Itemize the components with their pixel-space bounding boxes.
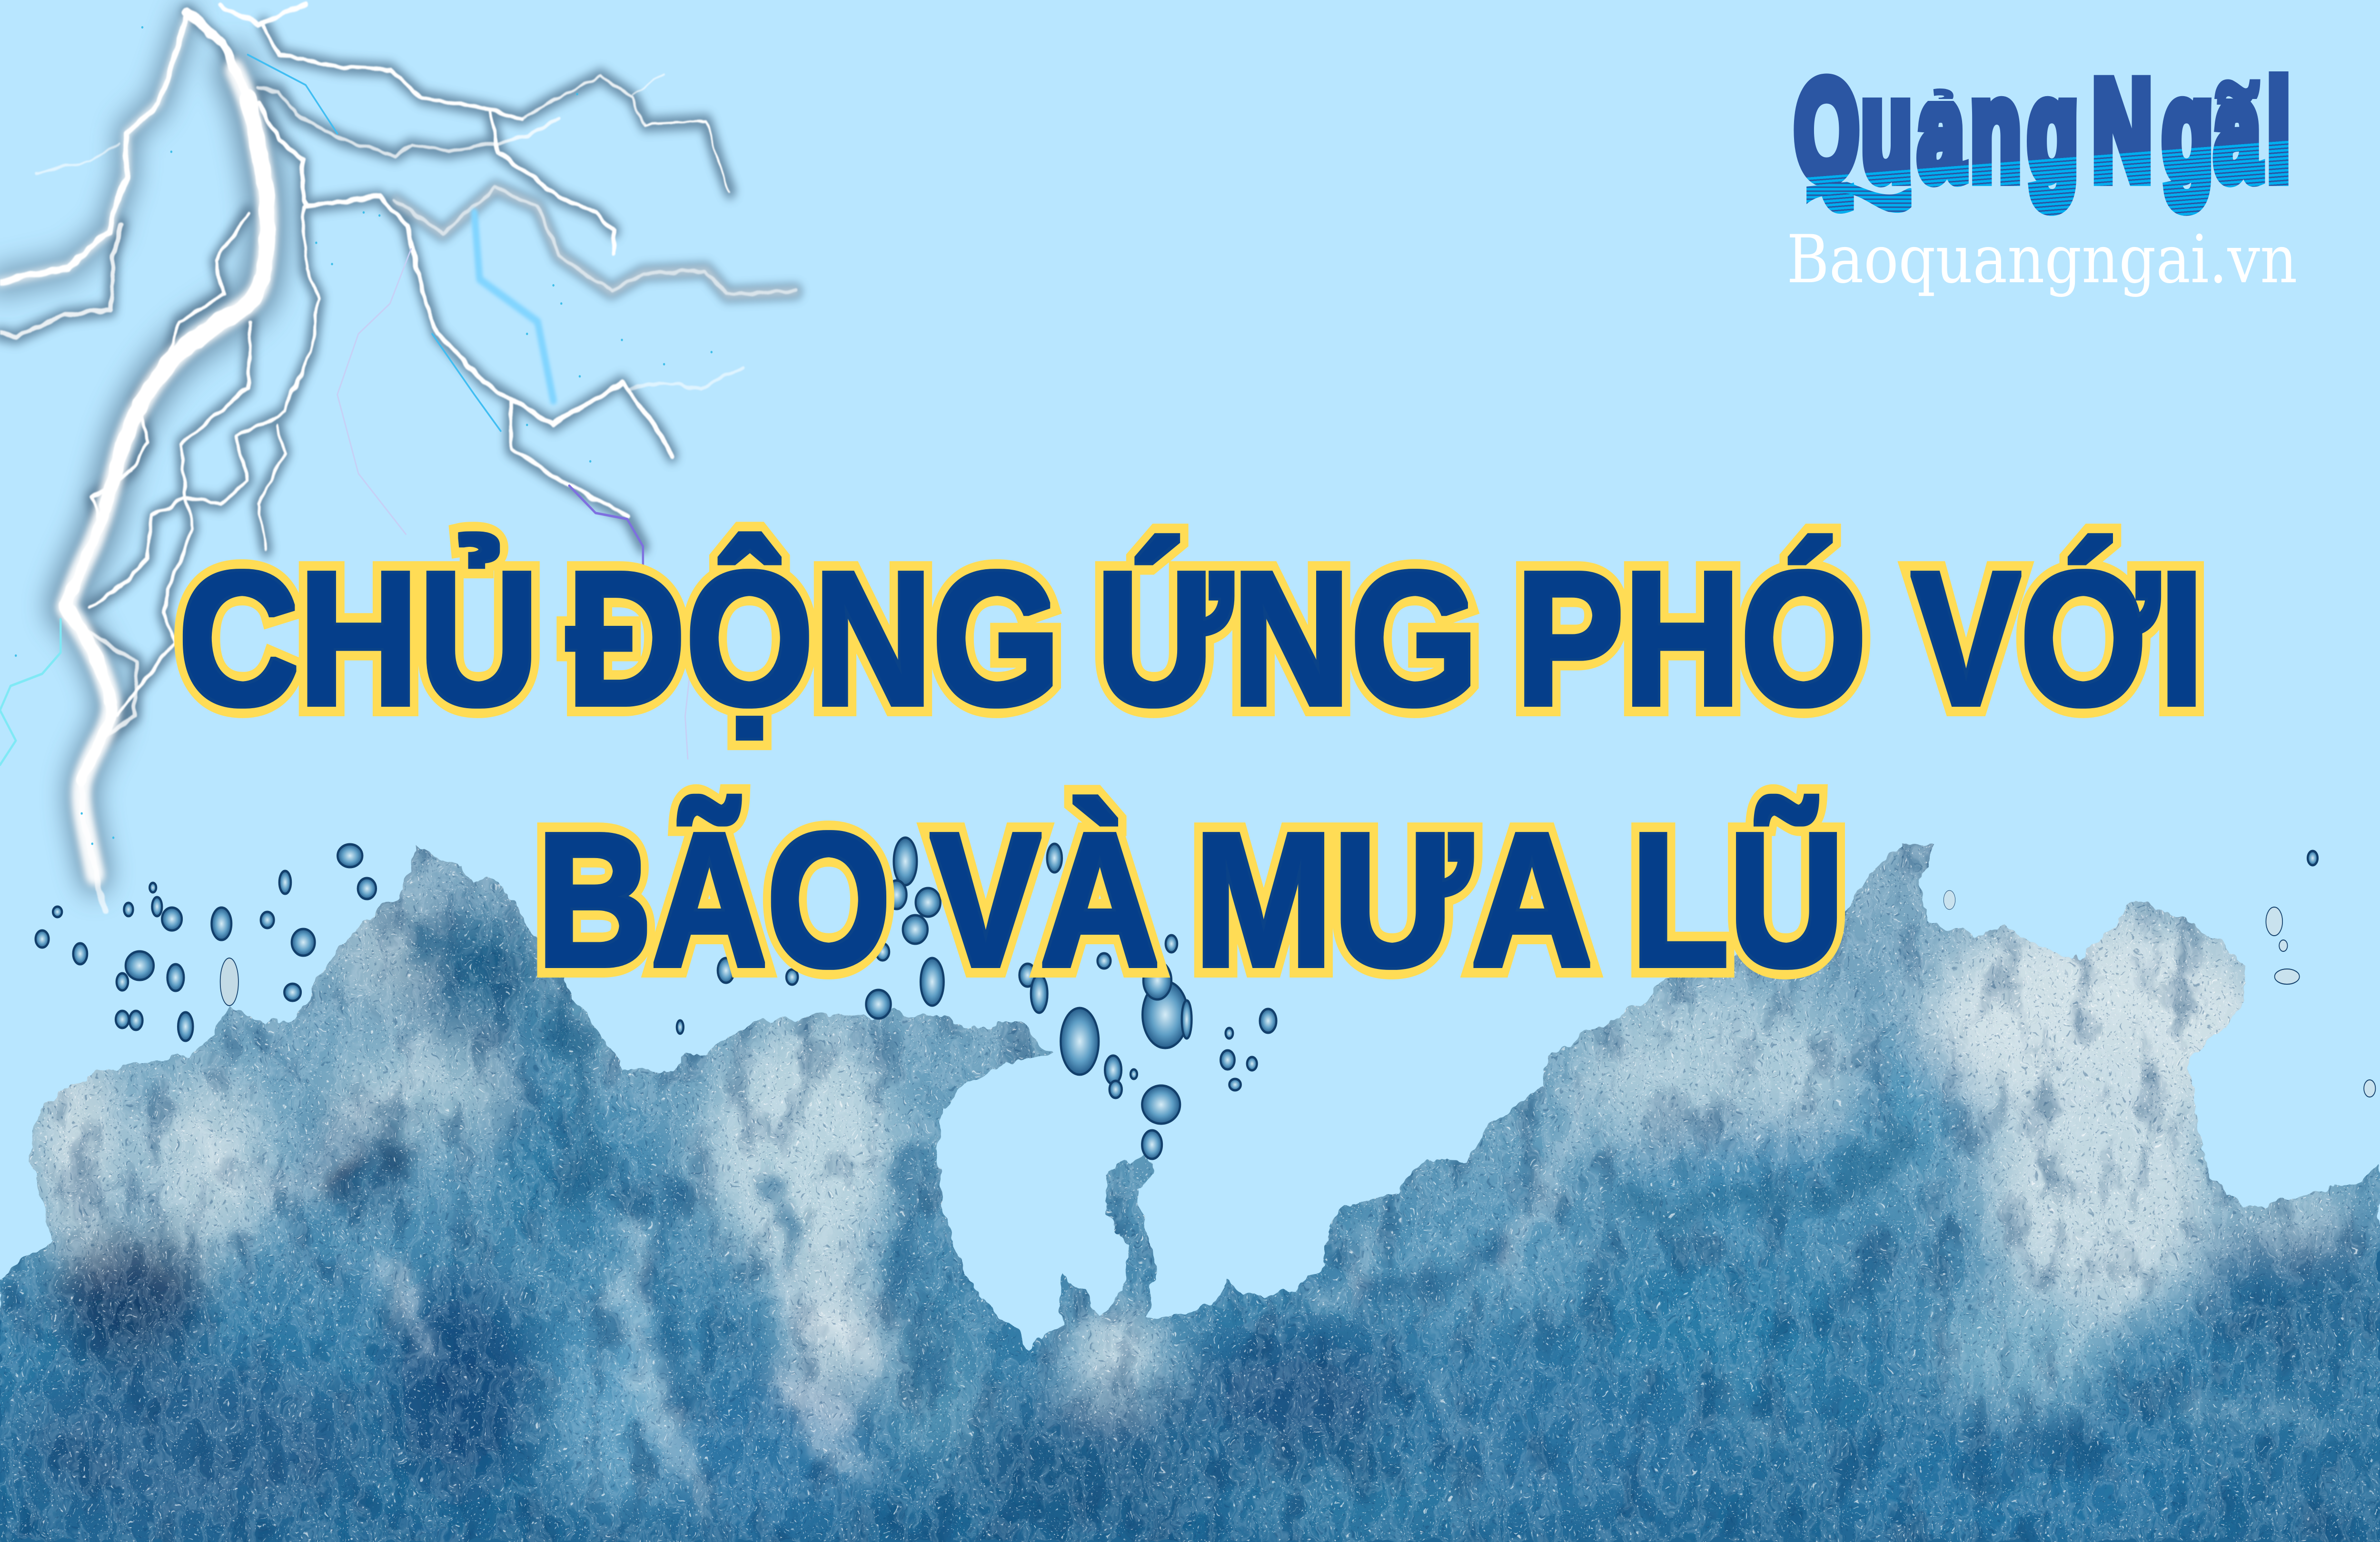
wave flow strokes bbox=[191, 952, 2328, 1510]
lightning branch shadow bbox=[0, 12, 796, 738]
lightning white bloom bbox=[0, 18, 796, 874]
logo: Quảng Ngãi bbox=[1795, 52, 2290, 222]
lightning bolt bbox=[0, 3, 796, 910]
water droplets bbox=[36, 838, 2375, 1159]
wave frame-edge fill bbox=[0, 1237, 2380, 1542]
title line 1: ỨNG bbox=[1096, 533, 1478, 744]
title line 2 bbox=[537, 794, 1844, 1005]
wave foam specks bbox=[0, 809, 2380, 1542]
lightning wide shadow bbox=[0, 18, 268, 874]
website label: Baoquangngai.vn bbox=[1786, 221, 2297, 298]
logo diacritics: ả bbox=[1920, 77, 1966, 168]
title bbox=[178, 532, 2204, 1005]
lightning coloured filaments bbox=[0, 55, 690, 765]
logo diacritics: ã bbox=[2207, 54, 2270, 222]
lightning sparks bbox=[15, 26, 713, 845]
title line 1 bbox=[178, 532, 2204, 744]
wave dark marbling bbox=[0, 809, 2380, 1542]
title line 2: MƯA bbox=[1194, 794, 1592, 1005]
logo wordmark: Quảng Ngãi bbox=[1795, 52, 2290, 209]
wave tonal masses bbox=[17, 888, 2380, 1542]
logo wave ribbon bbox=[1806, 182, 1912, 213]
title line 2: BÃO bbox=[537, 794, 891, 1005]
title line 2: LŨ bbox=[1631, 794, 1844, 1005]
logo diacritics bbox=[1920, 54, 2270, 222]
water wave bbox=[0, 809, 2380, 1542]
title line 1: ĐỘNG bbox=[567, 532, 1061, 744]
wave base colour bbox=[0, 809, 2380, 1542]
wave dark specks bbox=[0, 809, 2380, 1542]
title line 2: VÀ bbox=[931, 794, 1159, 1005]
wave light veins bbox=[0, 809, 2380, 1542]
lightning core strokes bbox=[0, 3, 796, 910]
title line 1: PHÓ bbox=[1516, 533, 1866, 744]
wave body bbox=[0, 809, 2380, 1542]
title line 1: CHỦ bbox=[178, 532, 539, 744]
title line 1: VỚI bbox=[1912, 533, 2204, 744]
